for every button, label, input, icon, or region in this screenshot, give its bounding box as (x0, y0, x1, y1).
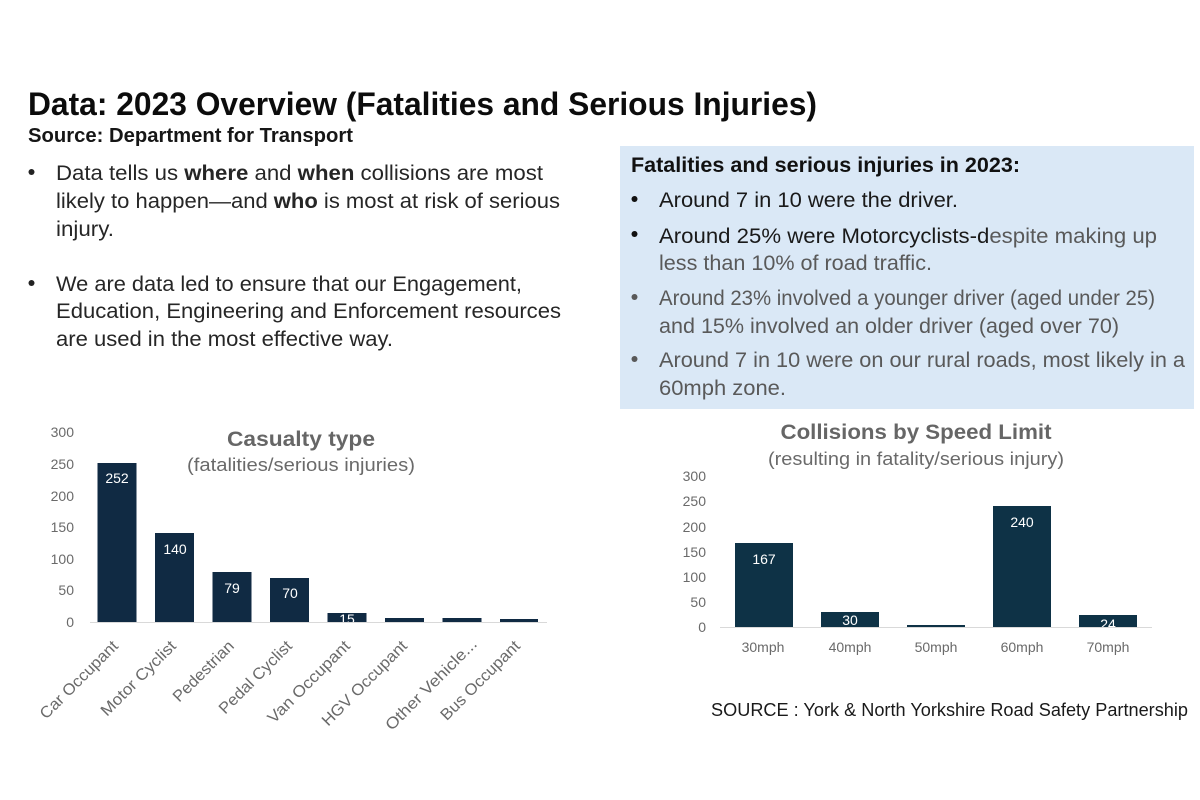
y axis: 250 (51, 456, 74, 472)
y axis: 50 (690, 594, 706, 610)
bullet: motorcyclists (632, 225, 1157, 275)
chart subtitle: (resulting in fatality/serious injury) (768, 449, 1064, 469)
bar value labels: 140 (163, 541, 187, 557)
category labels: Bus Occupant (438, 637, 524, 724)
y axis: 0 (698, 619, 706, 635)
source note: SOURCE : York & North Yorkshire Road Safety Partnership (711, 700, 1188, 720)
bar value labels: 24 (1100, 616, 1116, 632)
bar value labels: 240 (1010, 514, 1034, 530)
bars (735, 506, 1137, 627)
y axis: 250 (683, 493, 706, 509)
bar value labels: 79 (224, 580, 240, 596)
bullet: where and when: likely to happen—and who is most at risk of serious (56, 190, 560, 213)
category labels: Other Vehicle... (383, 636, 481, 734)
category labels: 70mph (1087, 639, 1129, 655)
bullet: younger and older drivers: and 15% involved an older driver (aged over 70) (659, 315, 1119, 338)
panel: fatalities and serious injuries in 2023 (620, 146, 1194, 409)
bullet: younger and older drivers (632, 287, 1155, 338)
category labels: Van Occupant (265, 637, 354, 727)
category labels: Pedestrian (170, 638, 238, 706)
y axis: 150 (683, 544, 706, 560)
y axis: 150 (51, 519, 74, 535)
bar value labels (752, 514, 1116, 632)
text block: left bullets (28, 162, 561, 351)
bullet: data led: are used in the most effective way. (56, 328, 393, 351)
y axis: 50 (58, 582, 74, 598)
category labels (37, 636, 524, 734)
y axis: 0 (66, 614, 74, 630)
y axis: 100 (683, 569, 706, 585)
category labels: Car Occupant (37, 637, 122, 723)
category labels: 40mph (829, 639, 871, 655)
bullet: rural roads: Around 7 in 10 were on our rural roads, most likely in a (659, 349, 1185, 372)
bullet: rural roads: 60mph zone. (659, 377, 786, 400)
y axis: 200 (683, 519, 706, 535)
category labels: HGV Occupant (319, 637, 411, 730)
bullet: motorcyclists: Around 25% were Motorcyclists-d espite making up (659, 225, 1157, 248)
chart title: Casualty type (227, 428, 375, 451)
panel heading: Fatalities and serious injuries in 2023: (631, 154, 1020, 177)
chart: casualty type (37, 424, 547, 734)
bar value labels: 167 (752, 551, 776, 567)
y axis (51, 424, 74, 630)
bullet: data led (28, 273, 561, 351)
subtitle: source: Source: Department for Transport (28, 125, 353, 147)
bullet: driver: Around 7 in 10 were the driver. (659, 189, 958, 212)
y axis (683, 468, 706, 635)
bullet: where and when: Data tells us where and when collisions are most (56, 162, 543, 185)
category labels: 60mph (1001, 639, 1043, 655)
bars (98, 463, 538, 622)
bullet: younger and older drivers: Around 23% involved a younger driver (aged under 25) (659, 287, 1155, 310)
bullet: data led: Education, Engineering and Enforcement resources (56, 300, 561, 323)
category labels: Pedal Cyclist (216, 637, 296, 718)
bar value labels: 15 (339, 611, 355, 627)
bullet: data led: We are data led to ensure that our Engagement, (56, 273, 522, 296)
chart: collisions by speed limit (683, 421, 1152, 655)
category labels (742, 639, 1129, 655)
y axis: 300 (683, 468, 706, 484)
bullet: where and when (28, 162, 560, 241)
bar value labels: 252 (105, 470, 129, 486)
y axis: 100 (51, 551, 74, 567)
category labels: 50mph (915, 639, 957, 655)
y axis: 200 (51, 488, 74, 504)
chart subtitle: (fatalities/serious injuries) (187, 455, 415, 475)
bar value labels: 70 (282, 585, 298, 601)
bullet: rural roads (632, 349, 1185, 400)
category labels: Motor Cyclist (98, 637, 180, 720)
title: Data: 2023 Overview (Fatalities and Serious Injuries) (28, 86, 817, 122)
bar value labels: 30 (842, 612, 858, 628)
bullet: motorcyclists: less than 10% of road traffic. (659, 252, 932, 275)
bullet: where and when: injury. (56, 218, 114, 241)
chart title: Collisions by Speed Limit (780, 421, 1052, 444)
category labels: 30mph (742, 639, 784, 655)
bar value labels (105, 470, 355, 627)
y axis: 300 (51, 424, 74, 440)
